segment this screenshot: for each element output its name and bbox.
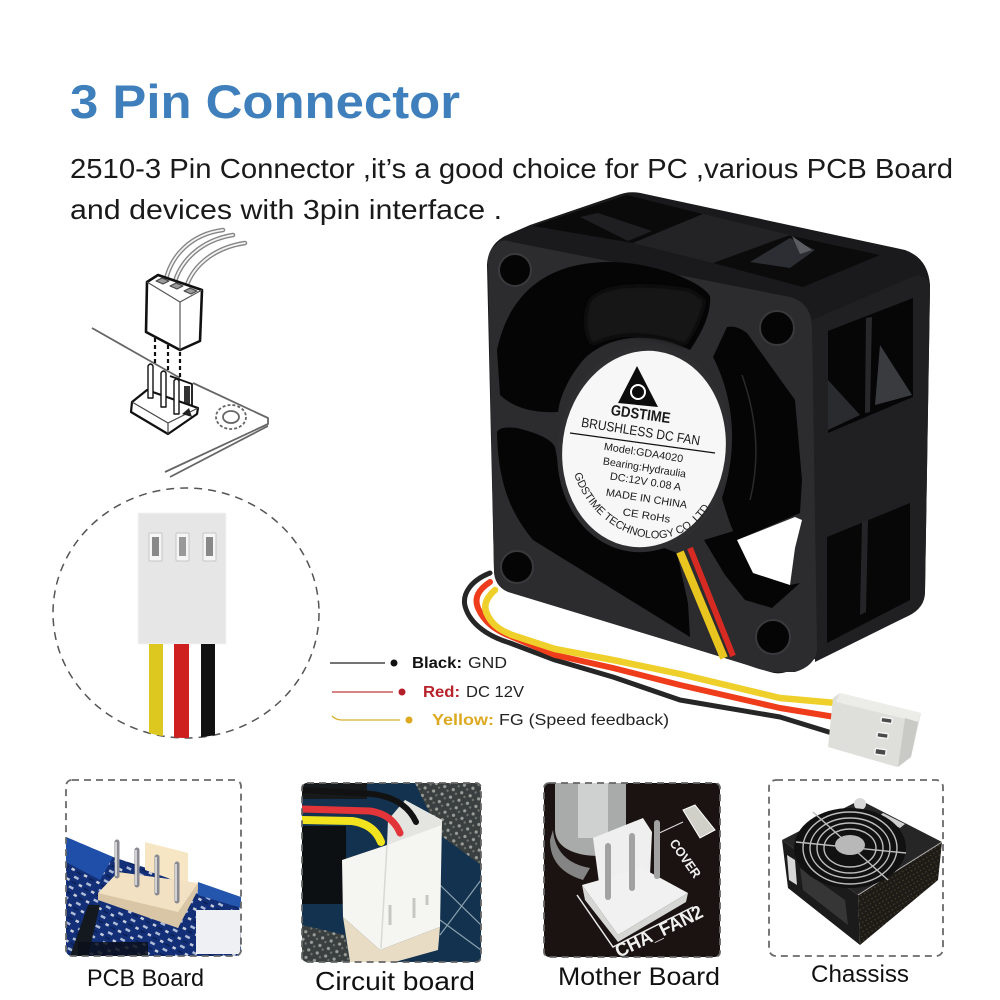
- dashed guides: [155, 338, 180, 378]
- label sticker: CE RoHs: [622, 506, 671, 526]
- hub shading: [742, 375, 756, 500]
- wires into hub: [680, 548, 733, 658]
- panel: Chassiss: [769, 780, 943, 956]
- label: Mother Board: Mother Board: [558, 963, 720, 991]
- yellow wire legend: FG (Speed feedback): [499, 712, 669, 729]
- front face: [488, 241, 817, 672]
- label sticker: Bearing:Hydraulia: [602, 456, 687, 481]
- title: 3 Pin Connector: [70, 75, 460, 128]
- black wire legend: [330, 655, 507, 672]
- top side with slots: [533, 195, 880, 287]
- power supply: [782, 798, 942, 945]
- red wire legend: [332, 684, 524, 701]
- fan outer body: [487, 192, 930, 673]
- label sticker: DC:12V 0.08 A: [609, 470, 682, 494]
- fan plug: [828, 693, 921, 767]
- label: Circuit board: Circuit board: [315, 966, 475, 996]
- cable strands: [165, 230, 245, 292]
- fan: [487, 192, 930, 674]
- label: PCB Board: PCB Board: [87, 965, 204, 992]
- fan cable harness: [464, 573, 836, 733]
- connector close-up circle: [53, 488, 319, 740]
- red wire legend: Red:: [423, 684, 460, 701]
- label sticker: GDSTIME: [610, 402, 672, 427]
- white gap through fan: [737, 517, 802, 585]
- label sticker: MADE IN CHINA: [605, 487, 688, 511]
- label sticker: Model:GDA4020: [603, 441, 684, 465]
- header socket: [170, 376, 192, 408]
- panel: Mother Board: [544, 783, 720, 962]
- gdstime logo: [618, 366, 658, 407]
- mounting holes: [499, 254, 794, 654]
- label sticker: [557, 350, 726, 552]
- board outline: [92, 328, 268, 477]
- black wire legend: Black:: [412, 655, 462, 672]
- text block: description: 2510-3 Pin Connector ,it’s a good choice for PC ,various PCB Board: [70, 153, 953, 184]
- panel: Mother Board: COVER: [667, 836, 704, 881]
- yellow wire legend: Yellow:: [432, 712, 494, 729]
- connector body: [138, 513, 226, 644]
- label: Chassiss: Chassiss: [811, 961, 909, 988]
- black wire legend: GND: [468, 655, 507, 672]
- contact slots: [149, 533, 216, 561]
- label sticker: BRUSHLESS DC FAN: [580, 415, 701, 448]
- yellow wire legend: [332, 712, 669, 729]
- text block: description: [70, 153, 953, 225]
- panel: PCB Board: [66, 780, 241, 956]
- text block: description: and devices with 3pin interface .: [70, 194, 502, 225]
- diagram: header installation line art: [92, 230, 268, 477]
- air openings: [497, 262, 802, 637]
- wire colour legend: [330, 655, 669, 729]
- wires: [149, 644, 215, 740]
- housing: [146, 275, 202, 350]
- label sticker: GDSTIME TECHNOLOGY CO.,LTD: [575, 472, 708, 538]
- right side panel: [812, 276, 930, 662]
- red wire legend: DC 12V: [466, 684, 524, 701]
- panel: Mother Board: CHA_FAN2: [612, 902, 707, 962]
- panel: Circuit board: [302, 783, 481, 962]
